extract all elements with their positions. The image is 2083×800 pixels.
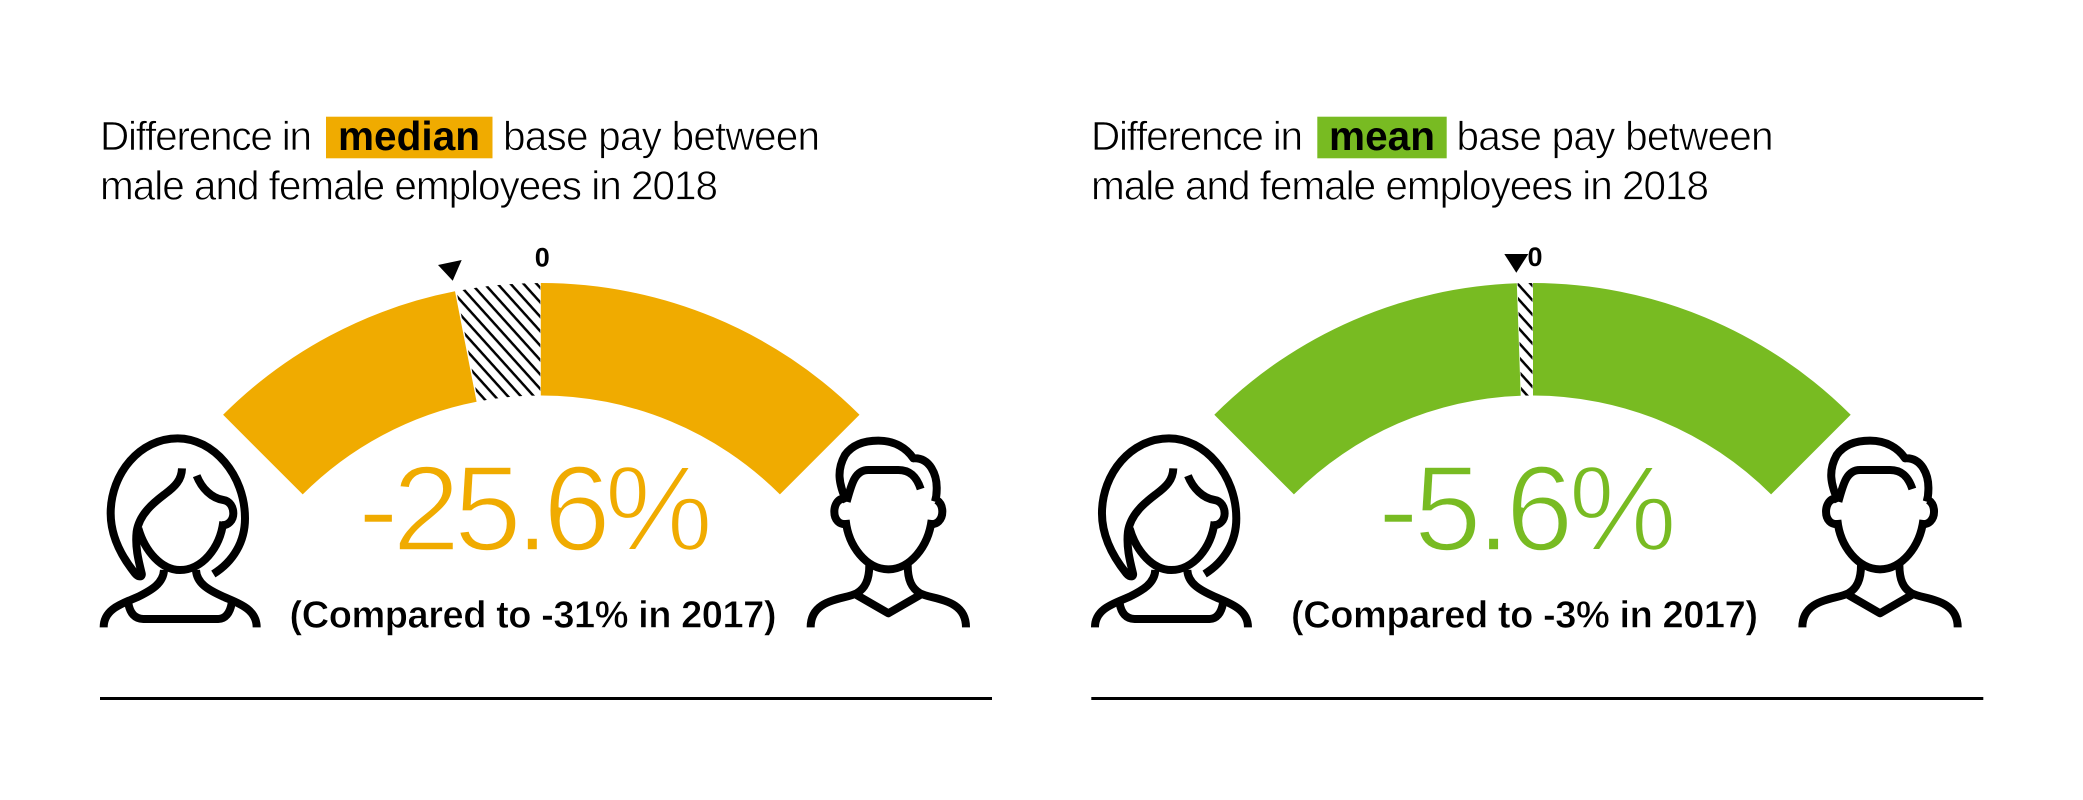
heading: mean: base pay between <box>1456 113 1774 159</box>
icon: man <box>1802 441 1958 627</box>
heading: mean <box>1091 113 1774 208</box>
comparison note: (Compared to -3% in 2017) <box>1291 594 1758 636</box>
rule <box>100 697 992 700</box>
heading: median: Difference in <box>100 113 312 159</box>
icon: man <box>811 441 966 627</box>
heading: median: male and female employees in 2018 <box>100 162 718 208</box>
heading: median: base pay between <box>503 113 820 159</box>
panel: median pay gap <box>100 113 992 700</box>
icon: woman <box>104 438 257 627</box>
value: -25.6%: -25.6% <box>358 441 713 577</box>
value: -5.6%: -5.6% <box>1378 441 1677 577</box>
comparison note: (Compared to -31% in 2017) <box>290 594 776 636</box>
heading: mean: Difference in <box>1091 113 1303 159</box>
heading: mean: mean <box>1329 113 1435 159</box>
heading: mean: male and female employees in 2018 <box>1091 162 1709 208</box>
hatched gap segment <box>456 283 540 402</box>
heading: median <box>100 113 820 208</box>
gauge marker arrow <box>1504 254 1528 273</box>
hatched gap segment <box>1518 283 1532 396</box>
panel: mean pay gap <box>1091 113 1983 700</box>
zero label: 0 <box>535 242 550 272</box>
zero label: 0 <box>1527 242 1543 272</box>
gauge marker arrow <box>438 260 462 281</box>
gauge: mean <box>1214 283 1851 494</box>
rule <box>1091 697 1983 700</box>
gauge: median <box>223 283 860 494</box>
heading: median: median <box>338 113 480 159</box>
icon: woman <box>1095 438 1248 627</box>
